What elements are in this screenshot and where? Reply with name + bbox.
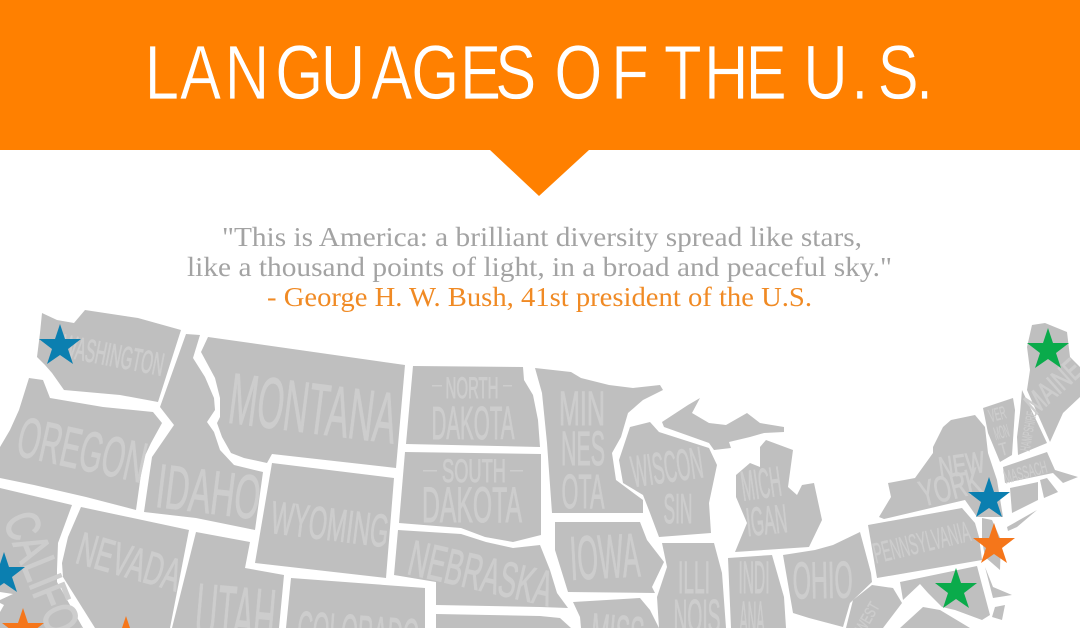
- state: Wisconsin: [619, 422, 717, 537]
- state: Connecticut: [1010, 482, 1038, 513]
- title: LANGUAGES OF THE U.S.: [145, 29, 933, 116]
- state: Delaware and eastern shore: [985, 567, 1012, 598]
- state: Illinois: ILLI: [678, 552, 710, 603]
- star: Washington, blue: [39, 324, 81, 364]
- state: Oregon: [0, 378, 162, 510]
- star: Maine, green: [1027, 328, 1069, 368]
- Long Island: [1007, 510, 1037, 531]
- state: Pennsylvania: [868, 508, 982, 578]
- state: Minnesota: MIN: [559, 383, 605, 436]
- state: New Hampshire: HAMPSHIRE: [1017, 410, 1039, 452]
- quote text: "This is America: a brilliant diversity spread like stars,: [222, 222, 862, 252]
- state: Indiana: INDI: [738, 552, 770, 603]
- quote attribution: - George H. W. Bush, 41st president of the U.S.: [267, 282, 812, 312]
- state: Minnesota: NES: [561, 423, 605, 476]
- state: Oregon: OREGON: [12, 405, 152, 496]
- state: Kansas: [436, 614, 571, 628]
- state: New York: [879, 415, 1003, 519]
- state: North Dakota: DAKOTA: [432, 397, 515, 449]
- star: New York, blue: [968, 477, 1010, 517]
- star: California, blue: [0, 552, 25, 592]
- header banner: [0, 0, 1080, 196]
- state: Nebraska: [394, 530, 568, 617]
- state: Michigan lower peninsula: IGAN: [744, 497, 789, 545]
- state: Vermont: T: [997, 439, 1010, 460]
- state: Colorado: [286, 578, 425, 628]
- map of the United States: WISCON: [628, 438, 706, 497]
- star: California, orange: [2, 608, 44, 628]
- star: Maryland, green: [935, 568, 977, 608]
- state: Michigan lower peninsula: [735, 440, 822, 552]
- state: Michigan upper peninsula: [662, 398, 784, 450]
- state: Rhode Island: [1040, 478, 1058, 498]
- state: Michigan lower peninsula: MICH: [738, 458, 784, 510]
- state: Nevada: [62, 507, 189, 628]
- state: West Virginia: [846, 585, 902, 628]
- state: Utah: [172, 532, 284, 628]
- state: South Dakota: DAKOTA: [422, 477, 522, 533]
- state: New York: NEW: [937, 446, 987, 485]
- state: Idaho: IDAHO: [153, 452, 264, 533]
- state: Washington: [37, 310, 181, 402]
- state: North Dakota: NORTH: [446, 372, 498, 405]
- star: Nevada, orange: [105, 616, 147, 628]
- state: Nevada: NEVADA: [71, 522, 188, 601]
- state: Virginia: [900, 607, 970, 628]
- star: New Jersey, orange: [973, 523, 1015, 563]
- map of the United States: MONTANA: [225, 359, 401, 459]
- quote text: [187, 222, 892, 312]
- state: Wyoming: WYOMING: [268, 491, 392, 557]
- state: South Dakota: SOUTH: [442, 453, 506, 489]
- state: Ohio: OHIO: [792, 551, 853, 611]
- state: New Jersey: [982, 518, 1001, 570]
- state: Iowa: IOWA: [568, 521, 642, 594]
- state: Minnesota: [535, 368, 663, 519]
- map of the United States: [0, 310, 1080, 628]
- state: Illinois: [657, 543, 726, 628]
- state: Idaho: [144, 334, 264, 533]
- state: Montana: [201, 337, 405, 468]
- state: Washington: WASHINGTON: [59, 328, 167, 383]
- state: Vermont: [983, 398, 1015, 462]
- state: New York: YORK: [915, 459, 985, 514]
- state: Indiana: [728, 552, 786, 628]
- quote text: like a thousand points of light, in a broad and peaceful sky.": [187, 252, 892, 282]
- state: North Dakota: [406, 366, 540, 449]
- state: Vermont: MON: [992, 421, 1011, 444]
- state: Minnesota: OTA: [562, 466, 604, 519]
- state: Wisconsin: SIN: [664, 485, 692, 532]
- state: South Dakota: [399, 452, 541, 542]
- state: Missouri: [573, 598, 659, 628]
- state: Vermont: VER: [987, 402, 1008, 426]
- state: Wyoming: [255, 463, 394, 578]
- Virginia eastern shore: [992, 605, 1005, 620]
- state: Ohio: [783, 532, 872, 627]
- state: Maryland: [900, 566, 990, 620]
- state: Iowa: [555, 521, 664, 594]
